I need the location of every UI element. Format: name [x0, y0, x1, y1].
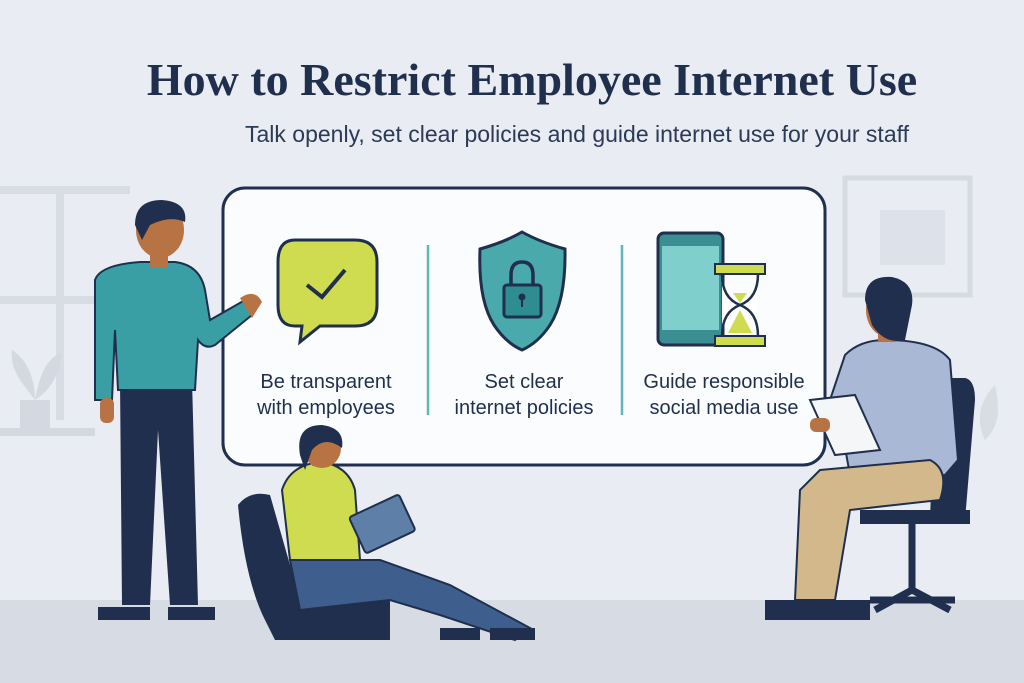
- icon: shield lock: [480, 232, 565, 350]
- text: set clear policies: Set clear: [485, 371, 564, 393]
- person: standing man: [95, 200, 262, 620]
- background desk and plant: [0, 350, 95, 436]
- subtitle: Talk openly, set clear policies and guide internet use for your staff: [245, 121, 910, 147]
- background frame right: [845, 178, 998, 440]
- icon: speech bubble check: [278, 240, 377, 342]
- text: guide social media: Guide responsible: [643, 371, 805, 393]
- icon: phone hourglass: [658, 233, 765, 346]
- person: sitting man with tablet: [765, 277, 975, 620]
- text: be transparent: with employees: [256, 397, 395, 419]
- person: sitting woman: [238, 425, 535, 640]
- panel: card: [223, 188, 825, 465]
- text: be transparent: Be transparent: [260, 371, 392, 393]
- text: guide social media: social media use: [650, 397, 798, 419]
- text: set clear policies: internet policies: [455, 397, 593, 419]
- background window left: [0, 190, 130, 420]
- title: How to Restrict Employee Internet Use: [147, 54, 917, 105]
